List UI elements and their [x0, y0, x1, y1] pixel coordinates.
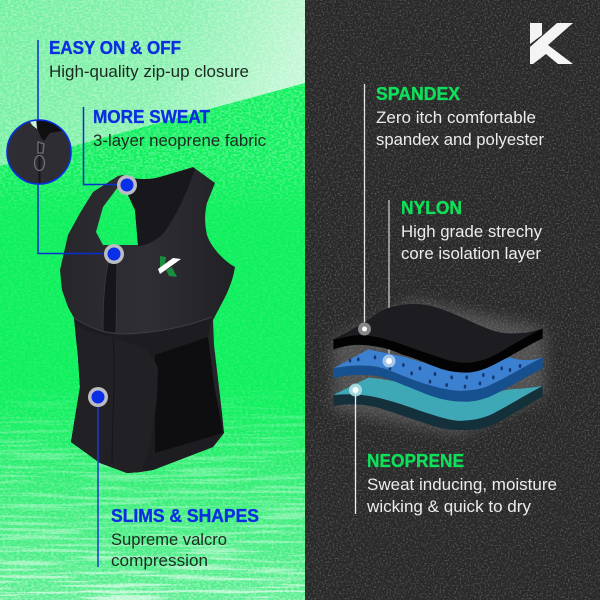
zipper inset circle [7, 118, 71, 186]
leader line: nylon [388, 200, 390, 361]
velcro patch [155, 337, 223, 453]
text block: nylon: High grade strechy [401, 223, 543, 241]
text block: easy on and off: High-quality zip-up closure [49, 63, 249, 81]
text block: spandex: Zero itch comfortable [376, 109, 536, 127]
teal neoprene layer [333, 378, 543, 430]
text block: slims and shapes: compression [111, 552, 208, 570]
zipper closure callout [7, 40, 110, 254]
leader line: slims and shapes [97, 405, 99, 567]
text block: neoprene: NEOPRENE [367, 450, 464, 471]
text block: neoprene: wicking & quick to dry [366, 498, 532, 516]
vest back interior [123, 168, 195, 246]
zipper [103, 263, 117, 333]
blue nylon layer [333, 349, 543, 402]
text block: slims and shapes [111, 505, 259, 570]
marker dot: neoprene [349, 384, 362, 396]
panel: dark background [305, 0, 600, 600]
leader line: easy on and off [38, 40, 110, 254]
text block: more sweat [93, 106, 266, 150]
text block: nylon: core isolation layer [401, 245, 542, 263]
belt flap [71, 326, 158, 473]
text block: spandex: SPANDEX [376, 83, 461, 104]
text block: spandex: spandex and polyester [376, 131, 545, 149]
text block: nylon [401, 197, 543, 263]
brand logo [530, 23, 573, 64]
panel: green background [0, 0, 305, 600]
marker dot: nylon [382, 354, 396, 368]
leader line: spandex [364, 84, 366, 329]
text block: easy on and off: EASY ON & OFF [49, 37, 181, 58]
text block: more sweat: MORE SWEAT [93, 106, 211, 127]
vest logo [158, 256, 181, 277]
marker dot: slims [88, 387, 108, 407]
leader line: more sweat [84, 107, 118, 184]
waist belt [71, 317, 224, 473]
text block: slims and shapes: Supreme valcro [111, 531, 227, 549]
text block: easy on and off [49, 37, 249, 81]
text block: neoprene [366, 450, 557, 516]
marker dot: more sweat [117, 175, 137, 195]
marker dot: spandex [358, 322, 371, 336]
fabric layers diagram [333, 304, 543, 430]
text block: spandex [376, 83, 545, 149]
text block: more sweat: 3-layer neoprene fabric [93, 132, 266, 150]
text block: slims and shapes: SLIMS & SHAPES [111, 505, 259, 526]
text block: neoprene: Sweat inducing, moisture [367, 476, 557, 494]
vest product photo [60, 167, 235, 473]
text block: nylon: NYLON [401, 197, 462, 218]
leader line: neoprene [354, 390, 356, 514]
vest body [60, 167, 235, 473]
marker dot: zipper [104, 244, 124, 264]
black spandex layer [333, 304, 543, 373]
